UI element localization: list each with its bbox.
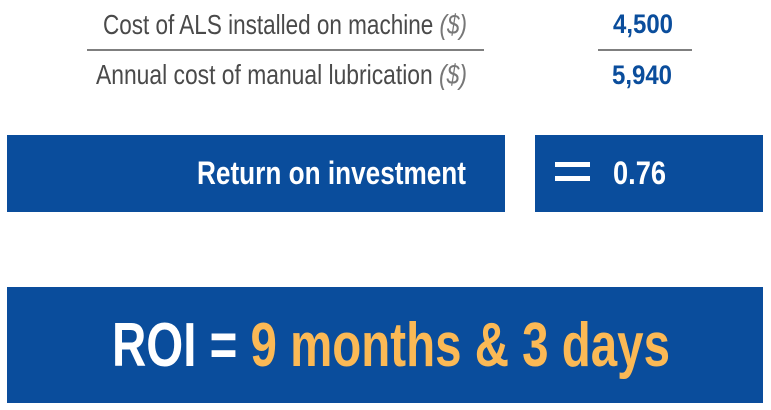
value: 5,940: 5,940 <box>612 60 672 90</box>
panel: ROI result <box>7 287 763 403</box>
panel: return on investment: Return on investment <box>197 155 466 191</box>
panel: value 0.76 <box>535 135 763 212</box>
formula: numerator label: Cost of ALS installed on machine ($) <box>103 9 467 40</box>
panel: value 0.76: 0.76 <box>613 155 666 191</box>
formula: denominator label: Annual cost of manual lubrication ($) <box>96 59 467 90</box>
panel: return on investment <box>7 135 505 212</box>
value: 4,500: 4,500 <box>613 9 673 39</box>
